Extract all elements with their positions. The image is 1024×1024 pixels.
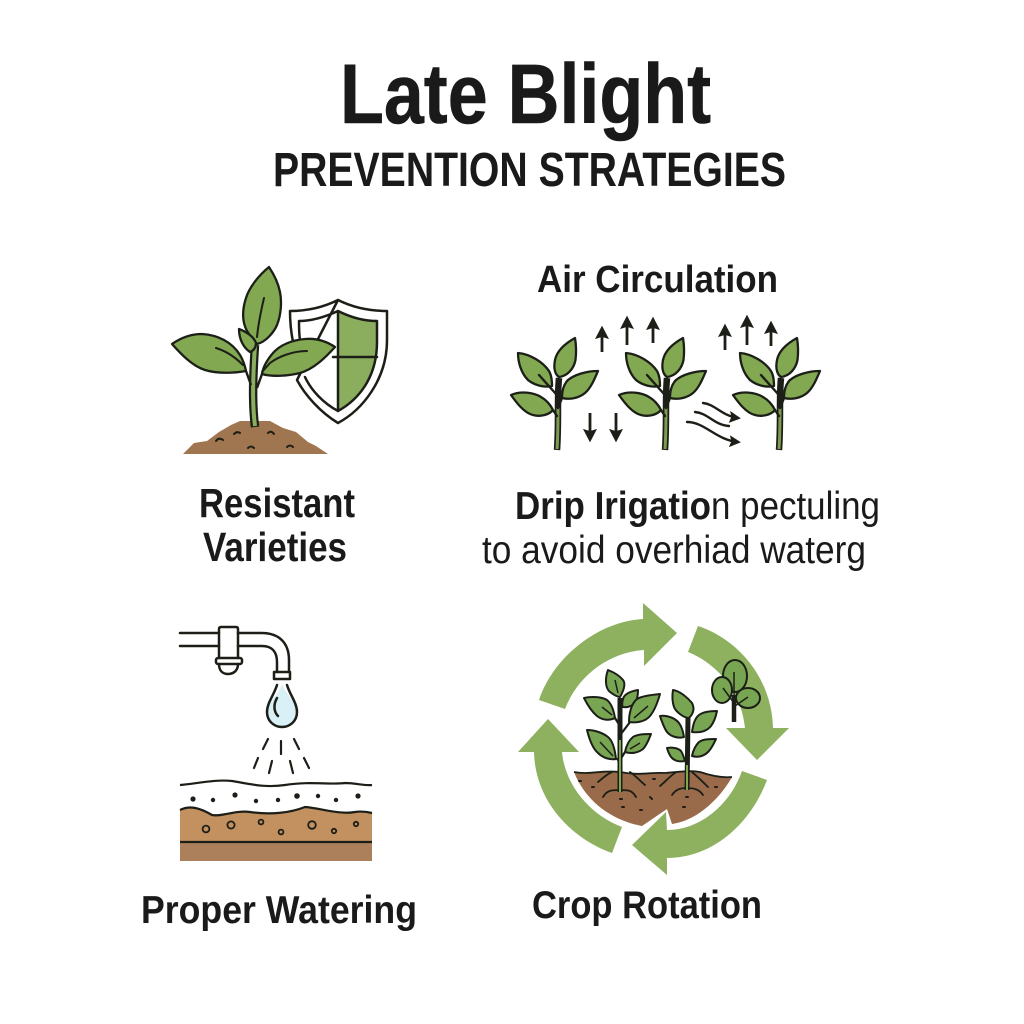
plant 2 [619,338,706,450]
label: crop rotation: Crop Rotation [532,884,762,927]
up and down arrows [590,318,771,439]
text block: drip irrigation: to avoid overhiad waterg [482,529,866,572]
small tree on arrow [712,660,760,722]
icon: crop rotation [518,603,789,875]
icon: air circulation plants [511,318,820,450]
text block: drip irrigation [482,485,880,572]
label: resistant varieties: Varieties [203,524,347,570]
plant right [660,690,717,790]
soil [574,771,732,826]
rotation arrow left [518,719,622,853]
text block: drip irrigation: Drip Irigation pectuling [515,485,880,528]
plant 1 [511,338,598,450]
label: resistant varieties: Resistant [199,480,355,526]
icon: resistant plant with shield [172,267,387,454]
plant 3 [733,338,820,450]
faucet [180,627,290,679]
title: Late Blight [340,47,711,141]
plant left [584,670,660,792]
label: resistant varieties [199,480,355,570]
soil layers [180,781,372,861]
rotation arrow right [688,626,789,760]
soil mound [183,421,328,454]
rotation arrow bottom [632,771,767,875]
rotation arrow top [539,603,677,709]
water drop [267,684,297,727]
heading: air circulation: Air Circulation [537,259,778,301]
subtitle: PREVENTION STRATEGIES [273,144,786,197]
wind arrows [687,403,738,442]
label: proper watering: Proper Watering [141,889,417,932]
leaves [172,267,335,376]
shield [290,300,387,423]
icon: proper watering [180,627,372,861]
stem [253,345,255,427]
spray [254,739,309,773]
